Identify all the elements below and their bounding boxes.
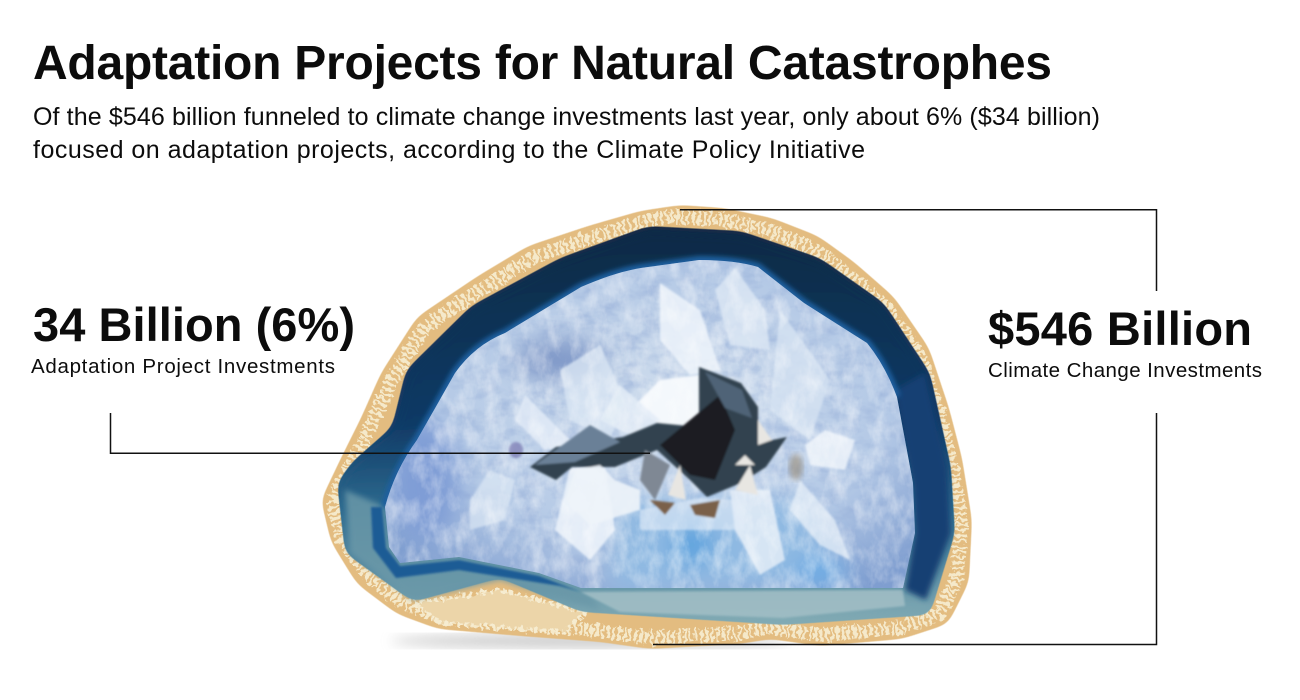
geode rim <box>321 205 972 649</box>
leader line: $546 billion bracket bottom <box>653 413 1156 644</box>
blue lower patch <box>391 340 850 590</box>
subtitle: Of the $546 billion funneled to climate change investments last year, only about 6% ($34 billion) <box>33 103 1100 131</box>
agate band <box>337 226 955 625</box>
leader line: adaptation <box>110 413 650 453</box>
title: Adaptation Projects for Natural Catastrophes <box>33 37 1052 90</box>
callout: adaptation <box>31 298 355 378</box>
leader line: $546 billion bracket top <box>680 210 1156 291</box>
subtitle: focused on adaptation projects, according to the Climate Policy Initiative <box>33 136 865 164</box>
crystal field <box>385 260 915 588</box>
callout: adaptation: 34 Billion (6%) <box>33 298 355 351</box>
callout: climate change: $546 Billion <box>988 302 1252 355</box>
callout: adaptation: Adaptation Project Investments <box>31 355 335 378</box>
callout: climate change: Climate Change Investments <box>988 359 1262 382</box>
crystal facets <box>470 268 855 575</box>
agate band colour layers <box>345 260 951 618</box>
illustration: blue agate geode <box>321 205 972 649</box>
central dark cavity <box>530 367 787 530</box>
callout: climate change <box>988 302 1262 382</box>
subtitle <box>33 103 1100 164</box>
